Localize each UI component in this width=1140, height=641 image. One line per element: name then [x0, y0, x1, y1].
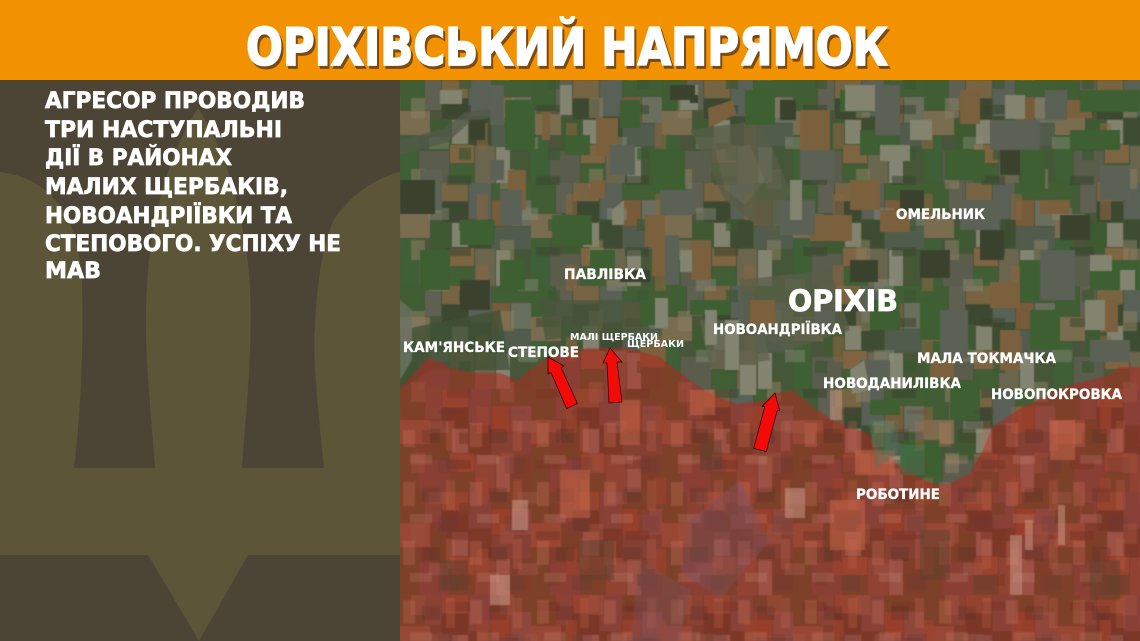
label: Robotyne: РОБОТИНЕ: [856, 487, 940, 503]
grey fields: [420, 85, 1130, 385]
header bar: [0, 0, 1140, 80]
text block: summary: СТЕПОВОГО. УСПІХУ НЕ: [45, 232, 341, 257]
text block: summary: АГРЕСОР ПРОВОДИВ: [45, 89, 305, 114]
label: Novoandriivka: НОВОАНДРІЇВКА: [713, 321, 842, 338]
arrow: Novoandriivka attack: [754, 393, 780, 452]
arrow: Stepove attack: [548, 357, 577, 409]
label: Novopokrovka: НОВОПОКРОВКА: [991, 387, 1122, 403]
label: Kamianske: КАМ'ЯНСЬКЕ: [403, 340, 505, 356]
river and town areas: [400, 108, 850, 390]
label: Novodanylivka: НОВОДАНИЛІВКА: [823, 376, 961, 392]
label: Stepove: СТЕПОВЕ: [508, 345, 579, 361]
label: Pavlivka: ПАВЛІВКА: [564, 267, 646, 283]
place labels: [403, 207, 1122, 503]
label: Omelnyk: ОМЕЛЬНИК: [896, 207, 986, 223]
background panel: [0, 80, 400, 641]
text block: summary: ТРИ НАСТУПАЛЬНІ: [45, 118, 282, 143]
title: ОРІХІВСЬКИЙ НАПРЯМОК: [246, 17, 888, 78]
arrow: Mali Shcherbaky attack: [603, 348, 622, 403]
label: Mala Tokmachka: МАЛА ТОКМАЧКА: [917, 351, 1056, 367]
pale fields: [440, 85, 1135, 395]
muted veil over imagery: [396, 76, 1140, 641]
text block: summary: [45, 89, 341, 284]
text block: summary: ДІЇ В РАЙОНАХ: [45, 145, 232, 171]
dark fields: [400, 85, 1090, 310]
label: Shcherbaky: ЩЕРБАКИ: [627, 339, 684, 350]
label: Mali Shcherbaky: МАЛІ ЩЕРБАКИ: [570, 332, 658, 343]
occupied territory field texture: [396, 390, 1140, 641]
label: Orikhiv: ОРІХІВ: [788, 284, 898, 318]
map: satellite imagery: [396, 76, 1140, 641]
trident emblem: [0, 108, 400, 641]
text block: summary: МАВ: [45, 259, 101, 284]
text block: summary: МАЛИХ ЩЕРБАКІВ,: [45, 175, 288, 200]
orange fields: [508, 90, 1118, 378]
text block: summary: НОВОАНДРІЇВКИ ТА: [45, 203, 292, 229]
green fields: [420, 90, 1140, 475]
occupied territory overlay: [396, 348, 1140, 641]
